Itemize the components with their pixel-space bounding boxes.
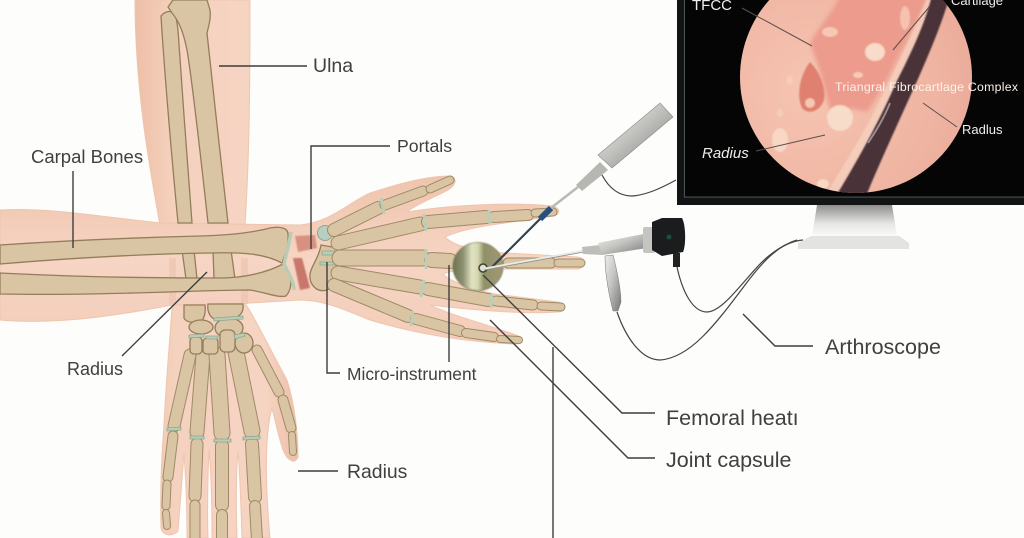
finger joints: horizontal hand (381, 198, 492, 326)
label: Carpal Bones (31, 146, 143, 248)
label: Micro-instrument: Micro-instrument (347, 364, 477, 384)
label: Radius lower: Radius (347, 461, 407, 483)
monitor (677, 0, 1024, 249)
vertical leader line (552, 347, 554, 538)
label: Joint capsule: Joint capsule (666, 448, 792, 472)
label: Arthroscope (743, 314, 941, 359)
endoscopic view circle (738, 0, 974, 197)
label: Carpal Bones: Carpal Bones (31, 146, 143, 167)
horizontal forearm and hand skin (0, 176, 585, 344)
label: Arthroscope: Arthroscope (825, 335, 941, 359)
label: Radius left: Radius (67, 359, 123, 379)
finger bones: horizontal hand (334, 180, 581, 340)
vertical forearm and hand skin (135, 0, 298, 538)
label: Radius left (67, 272, 207, 379)
arthroscope (484, 218, 803, 360)
label: Micro-instrument (327, 262, 477, 384)
scope label: Triangular Fibrocartilage Complex: Triangral Fibrocartlage Complex (835, 80, 1019, 94)
label: Ulna: Ulna (313, 55, 353, 77)
monitor stand (798, 205, 909, 249)
label: Radius lower (298, 461, 407, 483)
joint capsule ball (453, 242, 503, 290)
label: Ulna (219, 55, 353, 77)
instrument: micro-instrument (491, 103, 676, 268)
label: Femoral heat: Femoral heatı (666, 406, 799, 430)
label: Portals: Portals (397, 136, 452, 156)
scope label: Radius: Radius (702, 145, 749, 162)
vertical arm edge shading between horizontal bones (169, 258, 248, 304)
label: Joint capsule (490, 320, 792, 472)
scope leader lines (742, 6, 957, 151)
vertical forearm bones (161, 0, 243, 322)
wrist injury (293, 235, 317, 290)
hand carpals: vertical hand (167, 316, 260, 442)
label: Portals (311, 136, 452, 249)
hand carpal bones (310, 226, 338, 291)
label: Femoral heat (483, 275, 799, 430)
horizontal ulna and radius bones (0, 227, 294, 296)
scope label: Radlus: Radlus (962, 122, 1003, 137)
finger bones: vertical hand (166, 350, 293, 538)
